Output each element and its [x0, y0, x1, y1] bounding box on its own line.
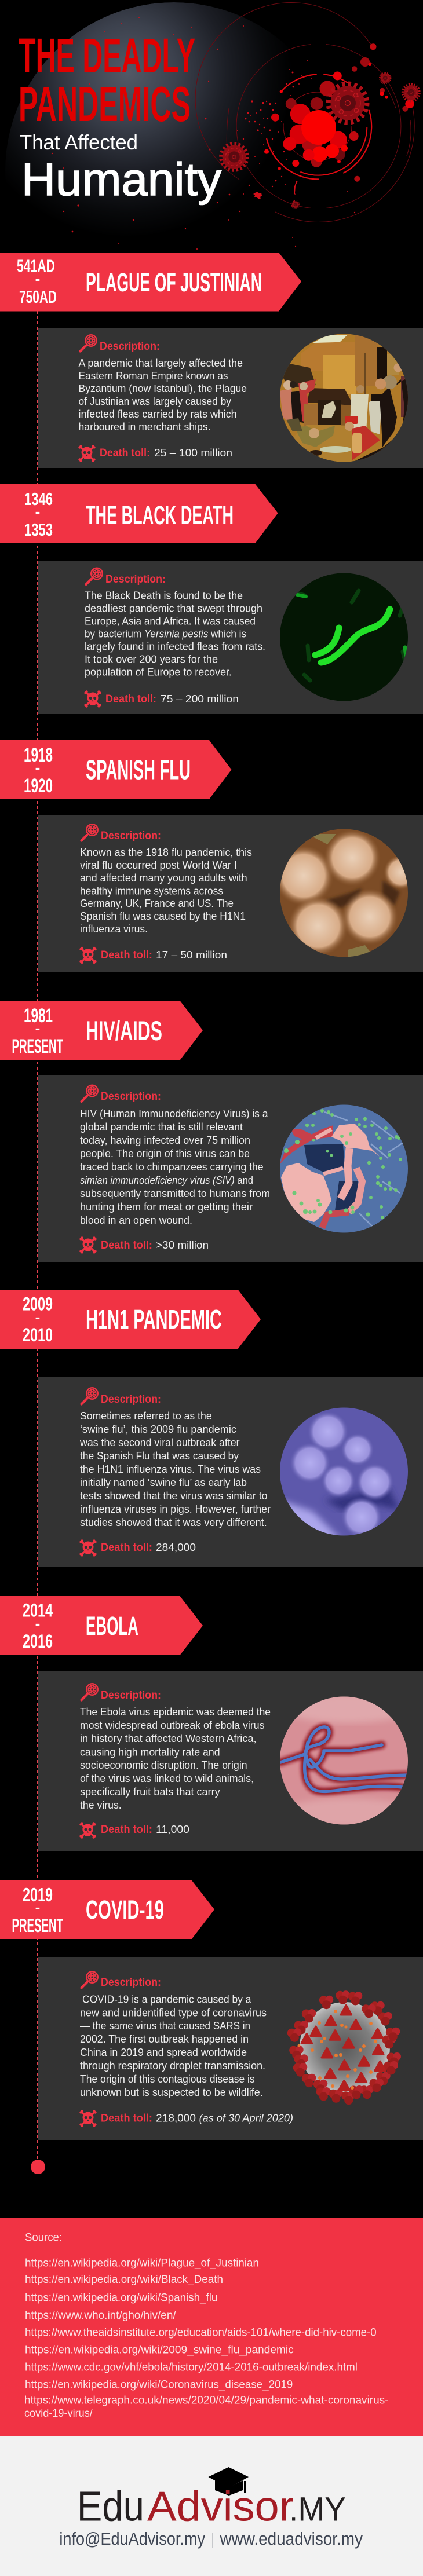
image: ebola virus filament — [280, 1694, 411, 1827]
description text: Europe, Asia and Africa. It was caused — [85, 616, 256, 627]
description text: specifically fruit bats that carry — [80, 1786, 220, 1798]
logo: eduadvisor.my: Edu — [77, 2484, 144, 2530]
image: green bacteria micrograph — [280, 573, 409, 701]
description text: of Justinian was largely caused by — [79, 396, 231, 407]
description text: healthy immune systems across — [80, 885, 223, 897]
contact line — [59, 2529, 363, 2549]
description text: Spanish flu was caused by the H1N1 — [80, 910, 246, 922]
description heading — [80, 334, 160, 353]
description text — [85, 590, 265, 678]
banner: 750AD — [19, 287, 57, 307]
panel — [38, 815, 423, 972]
sources panel — [0, 2218, 423, 2436]
description text: through respiratory droplet transmission. — [80, 2060, 265, 2072]
death toll: Death toll: — [101, 949, 152, 961]
death toll — [79, 1236, 209, 1254]
death toll: 25 – 100 million — [154, 447, 232, 459]
banner — [0, 740, 232, 799]
contact line: info@EduAdvisor.my — [59, 2529, 205, 2549]
description text: Eastern Roman Empire known as — [79, 370, 228, 382]
description text: people. The origin of this virus can be — [80, 1148, 250, 1159]
title: the deadly pandemics — [19, 28, 195, 132]
description text: ‘swine flu’, this 2009 flu pandemic — [80, 1424, 236, 1435]
panel — [38, 1671, 423, 1851]
description text: It took over 200 years for the — [85, 654, 218, 665]
description text: population of Europe to recover. — [85, 667, 232, 678]
banner: - — [35, 759, 40, 776]
banner — [0, 484, 278, 543]
source links: https://www.theaidsinstitute.org/education/aids-101/where-did-hiv-come-0 — [25, 2327, 377, 2339]
era 1: plague of justinian — [0, 253, 423, 468]
death toll: 17 – 50 million — [156, 949, 227, 961]
banner: 1918 — [24, 744, 53, 766]
banner: PRESENT — [12, 1915, 63, 1936]
description text: tests showed that the virus was similar to — [80, 1490, 268, 1502]
banner: HIV/AIDS — [86, 1015, 162, 1046]
description text: A pandemic that largely affected the — [79, 357, 243, 369]
description text: in history that affected Western Africa, — [80, 1733, 256, 1744]
death toll — [84, 690, 239, 708]
panel — [38, 1075, 423, 1262]
logo: eduadvisor.my: Advisor — [147, 2484, 294, 2530]
description text: the virus. — [80, 1799, 122, 1811]
description text: influenza virus. — [80, 923, 148, 935]
description text: studies showed that it was very different. — [80, 1517, 267, 1528]
banner: COVID-19 — [86, 1895, 164, 1924]
death toll — [78, 445, 232, 462]
description text — [80, 1993, 267, 2098]
source links: https://en.wikipedia.org/wiki/2009_swine_flu_pandemic — [25, 2344, 294, 2357]
description text: deadliest pandemic that swept through — [85, 602, 262, 614]
title: the deadly pandemics: THE DEADLY — [19, 28, 195, 83]
description text: most widespread outbreak of ebola virus — [80, 1719, 264, 1731]
description text: The Ebola virus epidemic was deemed the — [80, 1706, 271, 1718]
description text: was the second viral outbreak after — [79, 1437, 240, 1448]
description text: socioeconomic disruption. The origin — [80, 1759, 247, 1771]
description heading: Description: — [101, 1393, 161, 1406]
description text: infected fleas carried by rats which — [79, 408, 236, 420]
death toll — [79, 2110, 293, 2127]
description text — [80, 1706, 271, 1811]
era 4: hiv/aids — [0, 1001, 423, 1262]
death toll: >30 million — [156, 1239, 209, 1251]
death toll: Death toll: — [101, 2113, 152, 2124]
source links: https://www.cdc.gov/vhf/ebola/history/2014-2016-outbreak/index.html — [25, 2361, 358, 2373]
description heading: Description: — [101, 830, 161, 842]
banner: PRESENT — [12, 1035, 63, 1058]
panel — [38, 1957, 423, 2140]
blood splatter specks — [52, 17, 355, 250]
banner — [0, 253, 301, 312]
death toll: Death toll: — [101, 1824, 152, 1836]
banner: - — [35, 1308, 40, 1326]
dark planet sphere — [6, 2, 274, 219]
description heading: Description: — [101, 1977, 161, 1989]
banner — [0, 1596, 203, 1655]
banner: 2014 — [23, 1600, 53, 1620]
banner: 2019 — [23, 1884, 53, 1905]
banner: - — [35, 270, 40, 287]
contact line: www.eduadvisor.my — [220, 2529, 363, 2549]
description heading — [81, 1683, 161, 1702]
era 5: h1n1 pandemic — [0, 1290, 423, 1567]
description text: today, having infected over 75 million — [80, 1135, 250, 1146]
death toll — [79, 947, 227, 964]
timeline dashed line — [37, 311, 38, 2160]
banner: EBOLA — [86, 1611, 138, 1641]
description heading — [86, 568, 166, 586]
era 6: ebola — [0, 1596, 423, 1851]
description text: harboured in merchant ships. — [79, 421, 211, 433]
description heading — [81, 1387, 161, 1406]
banner: 541AD — [17, 256, 55, 276]
icon: graduation cap — [209, 2467, 249, 2496]
image: influenza virus micrograph — [280, 829, 408, 957]
description text: by bacterium Yersinia pestis which is — [85, 628, 246, 640]
banner: 2010 — [23, 1324, 53, 1345]
description text: initially named ‘swine flu’ as early lab — [80, 1477, 247, 1488]
panel — [38, 561, 423, 714]
death toll: 75 – 200 million — [161, 693, 239, 705]
death toll — [79, 1822, 189, 1839]
banner — [0, 1290, 261, 1349]
subtitle: that affected humanity: Humanity — [21, 153, 221, 205]
timeline end dot — [31, 2160, 45, 2174]
description text: influenza viruses in pigs. However, further — [80, 1503, 271, 1515]
description text: of the virus was linked to wild animals, — [80, 1773, 254, 1784]
banner: 2009 — [23, 1294, 53, 1315]
banner: - — [35, 1615, 40, 1632]
image: coronavirus illustration — [287, 1990, 401, 2105]
banner: 2016 — [23, 1631, 53, 1652]
source links: https://www.who.int/gho/hiv/en/ — [25, 2310, 176, 2322]
logo: eduadvisor.my — [77, 2484, 346, 2530]
source links: https://www.telegraph.co.uk/news/2020/04/29/pandemic-what-coronavirus- — [24, 2394, 389, 2407]
death toll: Death toll: — [100, 447, 150, 459]
death toll — [79, 1539, 196, 1557]
title: the deadly pandemics: PANDEMICS — [19, 77, 191, 132]
banner: SPANISH FLU — [86, 755, 191, 785]
description heading — [81, 1084, 161, 1103]
panel — [38, 328, 423, 468]
description text: The Black Death is found to be the — [85, 590, 243, 601]
virus cluster of red blobs — [264, 43, 414, 182]
banner: H1N1 PANDEMIC — [86, 1304, 222, 1334]
banner: - — [35, 1898, 40, 1916]
description text — [79, 357, 247, 433]
description text: traced back to chimpanzees carrying the — [80, 1161, 264, 1173]
subtitle: that affected humanity: That Affected — [20, 130, 138, 154]
header hero — [6, 2, 421, 250]
banner: 1920 — [24, 775, 53, 797]
image: hiv virus on cell — [280, 1104, 409, 1233]
source links: https://en.wikipedia.org/wiki/Coronavirus_disease_2019 — [25, 2379, 293, 2391]
source heading: Source: — [25, 2231, 62, 2244]
banner: THE BLACK DEATH — [86, 500, 234, 530]
corona virus particles — [221, 72, 420, 208]
logo: eduadvisor.my: .MY — [289, 2491, 346, 2529]
death toll: 11,000 — [156, 1823, 189, 1835]
description text: HIV (Human Immunodeficiency Virus) is a — [80, 1108, 268, 1119]
description text: COVID-19 is a pandemic caused by a — [82, 1993, 251, 2005]
era 2: the black death — [0, 484, 423, 714]
subtitle: that affected humanity — [20, 130, 221, 205]
source links — [24, 2257, 389, 2420]
description text: China in 2019 and spread worldwide — [80, 2047, 247, 2058]
description heading: Description: — [100, 341, 160, 353]
description text: viral flu occurred post World War I — [80, 859, 237, 871]
description text — [79, 1410, 271, 1528]
image: h1n1 virus micrograph — [280, 1407, 409, 1541]
banner: 1346 — [24, 489, 53, 509]
panel — [38, 1377, 423, 1567]
death toll: (as of 30 April 2020) — [199, 2112, 293, 2124]
description text: and affected many young adults with — [80, 872, 247, 884]
banner: - — [35, 503, 40, 520]
image: medieval plague painting — [280, 334, 409, 462]
era 3: spanish flu — [0, 740, 423, 972]
description heading — [81, 1971, 161, 1989]
banner: - — [35, 1019, 40, 1037]
description text: Byzantium (now Istanbul), the Plague — [79, 383, 247, 394]
banner: 1981 — [24, 1005, 53, 1027]
description text: the Spanish Flu that was caused by — [80, 1450, 239, 1462]
description text: causing high mortality rate and — [80, 1746, 220, 1758]
description text: simian immunodeficiency virus (SIV) and — [80, 1174, 253, 1186]
source links: https://en.wikipedia.org/wiki/Black_Death — [25, 2274, 223, 2286]
banner: 1353 — [24, 519, 53, 540]
description heading: Description: — [105, 573, 166, 586]
description text: Sometimes referred to as the — [80, 1410, 212, 1422]
banner — [0, 1001, 203, 1060]
description text — [80, 1108, 270, 1226]
description heading: Description: — [101, 1091, 161, 1103]
death toll: Death toll: — [101, 1542, 152, 1554]
source links: https://en.wikipedia.org/wiki/Spanish_flu — [25, 2292, 217, 2304]
orbit rings — [195, 3, 414, 222]
source links: https://en.wikipedia.org/wiki/Plague_of_Justinian — [25, 2257, 259, 2270]
death toll: Death toll: — [105, 693, 156, 705]
banner: PLAGUE OF JUSTINIAN — [86, 268, 262, 297]
description text: Known as the 1918 flu pandemic, this — [80, 847, 252, 858]
death toll: 284,000 — [156, 1541, 196, 1553]
description text: The origin of this contagious disease is — [80, 2073, 255, 2085]
death toll: 218,000 — [156, 2112, 196, 2124]
description text: unknown but is suspected to be wildlife. — [80, 2087, 263, 2098]
death toll: Death toll: — [101, 1239, 152, 1252]
banner — [0, 1880, 214, 1939]
description text: hunting them for meat or getting their — [80, 1201, 253, 1213]
era 7: covid-19 — [0, 1880, 423, 2140]
description text: largely found in infected fleas from rats. — [85, 641, 265, 653]
source links: covid-19-virus/ — [24, 2407, 93, 2420]
footer — [0, 2436, 423, 2576]
description text: 2002. The first outbreak happened in — [80, 2033, 249, 2045]
description text: subsequently transmitted to humans from — [80, 1188, 270, 1199]
description text — [80, 847, 252, 935]
description text: blood in an open wound. — [80, 1214, 192, 1226]
description text: the H1N1 influenza virus. The virus was — [80, 1463, 261, 1475]
description text: new and unidentified type of coronavirus — [80, 2007, 267, 2019]
description text: Germany, UK, France and US. The — [80, 898, 234, 909]
description text: — the same virus that caused SARS in — [80, 2020, 250, 2032]
description text: global pandemic that is still relevant — [80, 1121, 243, 1133]
description heading — [81, 824, 161, 842]
description heading: Description: — [101, 1689, 161, 1702]
